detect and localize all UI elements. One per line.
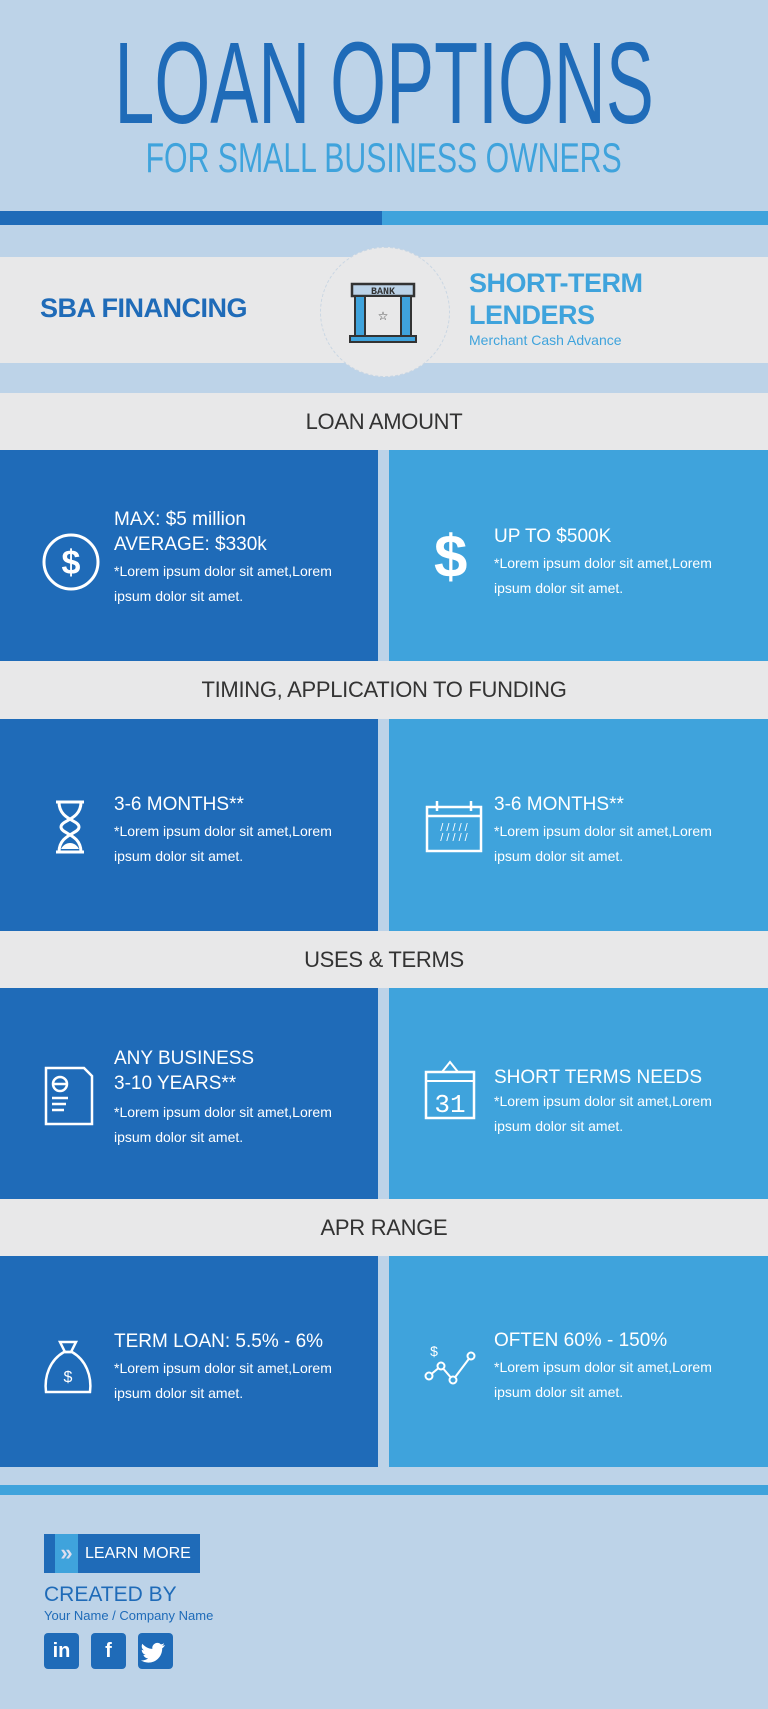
icon: document — [44, 1066, 94, 1126]
panel: short-term APR: *Lorem ipsum dolor sit amet,Lorem — [494, 1359, 712, 1375]
panel: SBA timing: *Lorem ipsum dolor sit amet,Lorem — [114, 823, 332, 839]
header: APR range — [0, 1199, 768, 1256]
comparison band — [0, 257, 768, 363]
icon: money bag: $ — [64, 1369, 73, 1386]
icon: linkedin: in — [53, 1640, 70, 1662]
panel: SBA APR: TERM LOAN: 5.5% - 6% — [114, 1331, 323, 1352]
icon: money bag — [44, 1340, 92, 1394]
bank icon circle: ☆ — [378, 309, 388, 323]
header: loan amount — [0, 393, 768, 450]
icon: dollar: $ — [434, 523, 467, 590]
panel: SBA uses — [0, 988, 378, 1199]
header: APR range: APR RANGE — [321, 1215, 447, 1240]
panel: short-term loan amount — [389, 450, 768, 661]
learn more button: » — [60, 1540, 73, 1565]
panel: short-term APR: ipsum dolor sit amet. — [494, 1384, 623, 1400]
panel: short-term loan amount: ipsum dolor sit amet. — [494, 580, 623, 596]
title: LOAN OPTIONS — [114, 18, 654, 148]
panel: SBA uses: ANY BUSINESS — [114, 1048, 254, 1069]
panel: short-term uses: ipsum dolor sit amet. — [494, 1118, 623, 1134]
panel: SBA APR: *Lorem ipsum dolor sit amet,Lorem — [114, 1360, 332, 1376]
icon: calendar 31: 31 — [434, 1090, 466, 1120]
created by: CREATED BY — [44, 1583, 177, 1606]
icon: twitter — [138, 1633, 173, 1669]
short-term lenders label — [469, 268, 642, 348]
header: timing: TIMING, APPLICATION TO FUNDING — [201, 677, 567, 702]
icon: dollar circle: $ — [62, 544, 81, 582]
header: timing — [0, 661, 768, 719]
icon: line chart: $ — [430, 1343, 438, 1359]
icon: hourglass — [56, 800, 84, 854]
icon: dollar circle — [42, 534, 100, 590]
short-term lenders label: LENDERS — [469, 300, 595, 330]
bank icon circle: BANK — [371, 287, 395, 298]
panel: SBA loan amount: AVERAGE: $330k — [114, 534, 267, 555]
learn more button: LEARN MORE — [85, 1545, 191, 1562]
panel: SBA APR: ipsum dolor sit amet. — [114, 1385, 243, 1401]
icon: calendar: / / / / / — [440, 832, 469, 844]
panel: SBA loan amount: *Lorem ipsum dolor sit amet,Lorem — [114, 563, 332, 579]
panel: SBA uses: 3-10 YEARS** — [114, 1073, 236, 1094]
short-term lenders label: Merchant Cash Advance — [469, 332, 622, 348]
bank icon circle — [320, 247, 450, 377]
created by: Your Name / Company Name — [44, 1608, 213, 1623]
panel: short-term APR: OFTEN 60% - 150% — [494, 1330, 667, 1351]
panel: short-term APR — [389, 1256, 768, 1467]
icon: line chart — [424, 1343, 476, 1384]
panel: SBA uses: ipsum dolor sit amet. — [114, 1129, 243, 1145]
panel: short-term loan amount: UP TO $500K — [494, 526, 611, 547]
panel: SBA loan amount: ipsum dolor sit amet. — [114, 588, 243, 604]
icon: facebook: f — [105, 1640, 112, 1662]
icon: linkedin — [44, 1633, 79, 1669]
icon: calendar — [426, 801, 482, 852]
panel: SBA timing: ipsum dolor sit amet. — [114, 848, 243, 864]
created by — [44, 1583, 213, 1623]
icon: calendar 31 — [424, 1060, 476, 1120]
panel: short-term timing: ipsum dolor sit amet. — [494, 848, 623, 864]
subtitle: FOR SMALL BUSINESS OWNERS — [146, 134, 622, 181]
SBA financing label: SBA FINANCING — [40, 293, 247, 323]
header: uses & terms — [0, 931, 768, 988]
icon: calendar: / / / / / — [440, 822, 469, 834]
panel: SBA APR — [0, 1256, 378, 1467]
learn more button — [44, 1534, 200, 1573]
panel: SBA loan amount — [0, 450, 378, 661]
social icons — [44, 1633, 173, 1669]
panel: short-term uses: *Lorem ipsum dolor sit amet,Lorem — [494, 1093, 712, 1109]
short-term lenders label: SHORT-TERM — [469, 268, 642, 298]
panel: SBA timing — [0, 719, 378, 931]
header: loan amount: LOAN AMOUNT — [306, 409, 462, 434]
color bar — [0, 211, 768, 225]
panel: short-term timing — [389, 719, 768, 931]
panel: SBA loan amount: MAX: $5 million — [114, 509, 246, 530]
panel: short-term timing: 3-6 MONTHS** — [494, 794, 624, 815]
panel: short-term loan amount: *Lorem ipsum dolor sit amet,Lorem — [494, 555, 712, 571]
panel: SBA timing: 3-6 MONTHS** — [114, 794, 244, 815]
panel: SBA uses: *Lorem ipsum dolor sit amet,Lorem — [114, 1104, 332, 1120]
panel: short-term timing: *Lorem ipsum dolor sit amet,Lorem — [494, 823, 712, 839]
panel: short-term uses: SHORT TERMS NEEDS — [494, 1067, 702, 1088]
panel: short-term uses — [389, 988, 768, 1199]
header: uses & terms: USES & TERMS — [304, 947, 464, 972]
footer strip — [0, 1485, 768, 1495]
icon: facebook — [91, 1633, 126, 1669]
